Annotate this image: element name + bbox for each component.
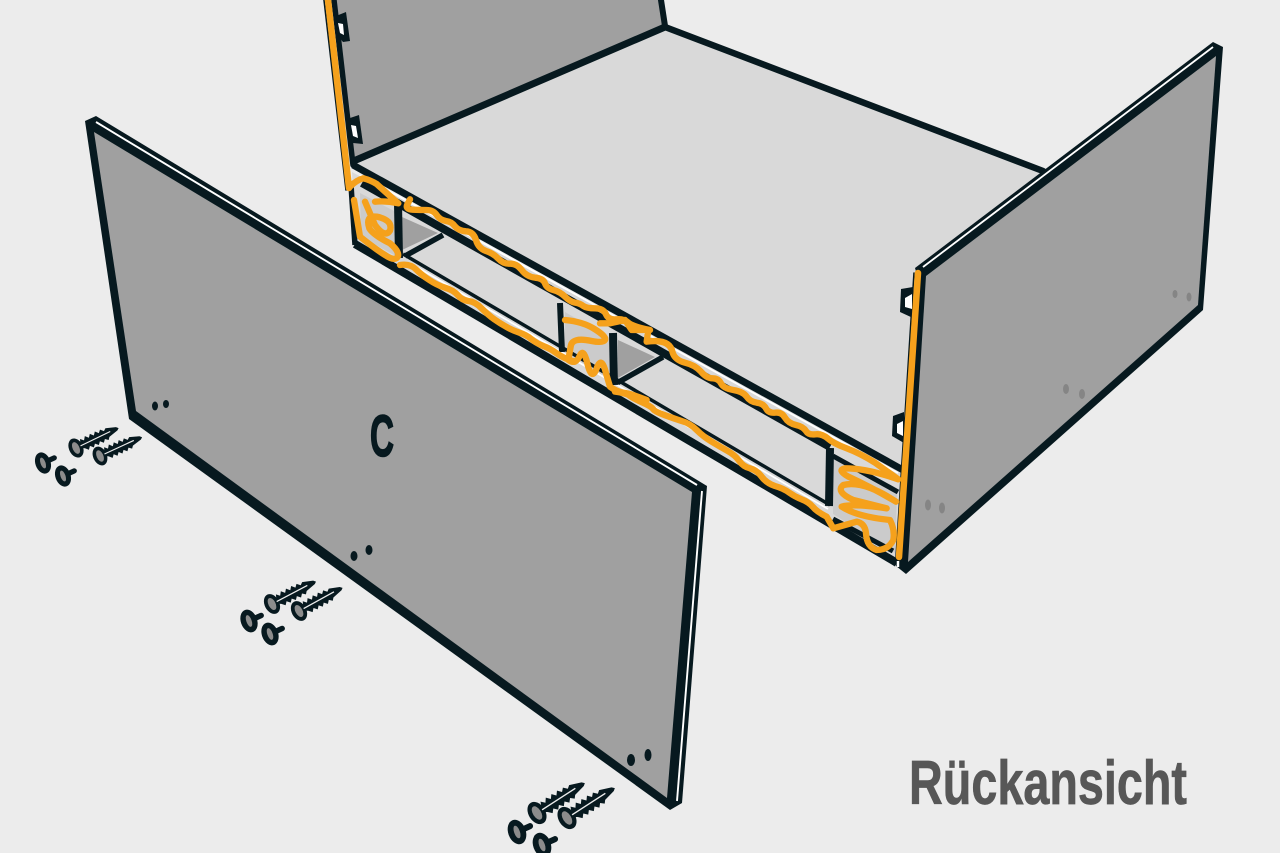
cabinet drawer body xyxy=(324,0,1223,574)
glue: left squiggles xyxy=(350,178,650,400)
floor and back edges xyxy=(324,0,1043,557)
front frame openings xyxy=(351,165,903,563)
right side panel xyxy=(896,42,1223,574)
back panel xyxy=(334,0,666,162)
right clips xyxy=(892,287,913,443)
caption: Rückansicht xyxy=(909,749,1187,818)
screws group middle xyxy=(237,572,348,648)
glue: orange side edges xyxy=(328,0,918,557)
glue: right squiggles xyxy=(600,320,898,550)
right panel holes xyxy=(925,290,1192,514)
panel outline xyxy=(85,116,707,810)
floor panel xyxy=(353,27,1045,475)
panel white edges xyxy=(96,122,702,801)
screws group left xyxy=(32,419,146,489)
screws group right xyxy=(504,773,621,853)
panel face xyxy=(94,132,692,798)
panel letter C: C xyxy=(370,404,394,469)
panel C xyxy=(85,116,707,810)
panel holes xyxy=(152,400,652,766)
left clips xyxy=(336,12,363,144)
